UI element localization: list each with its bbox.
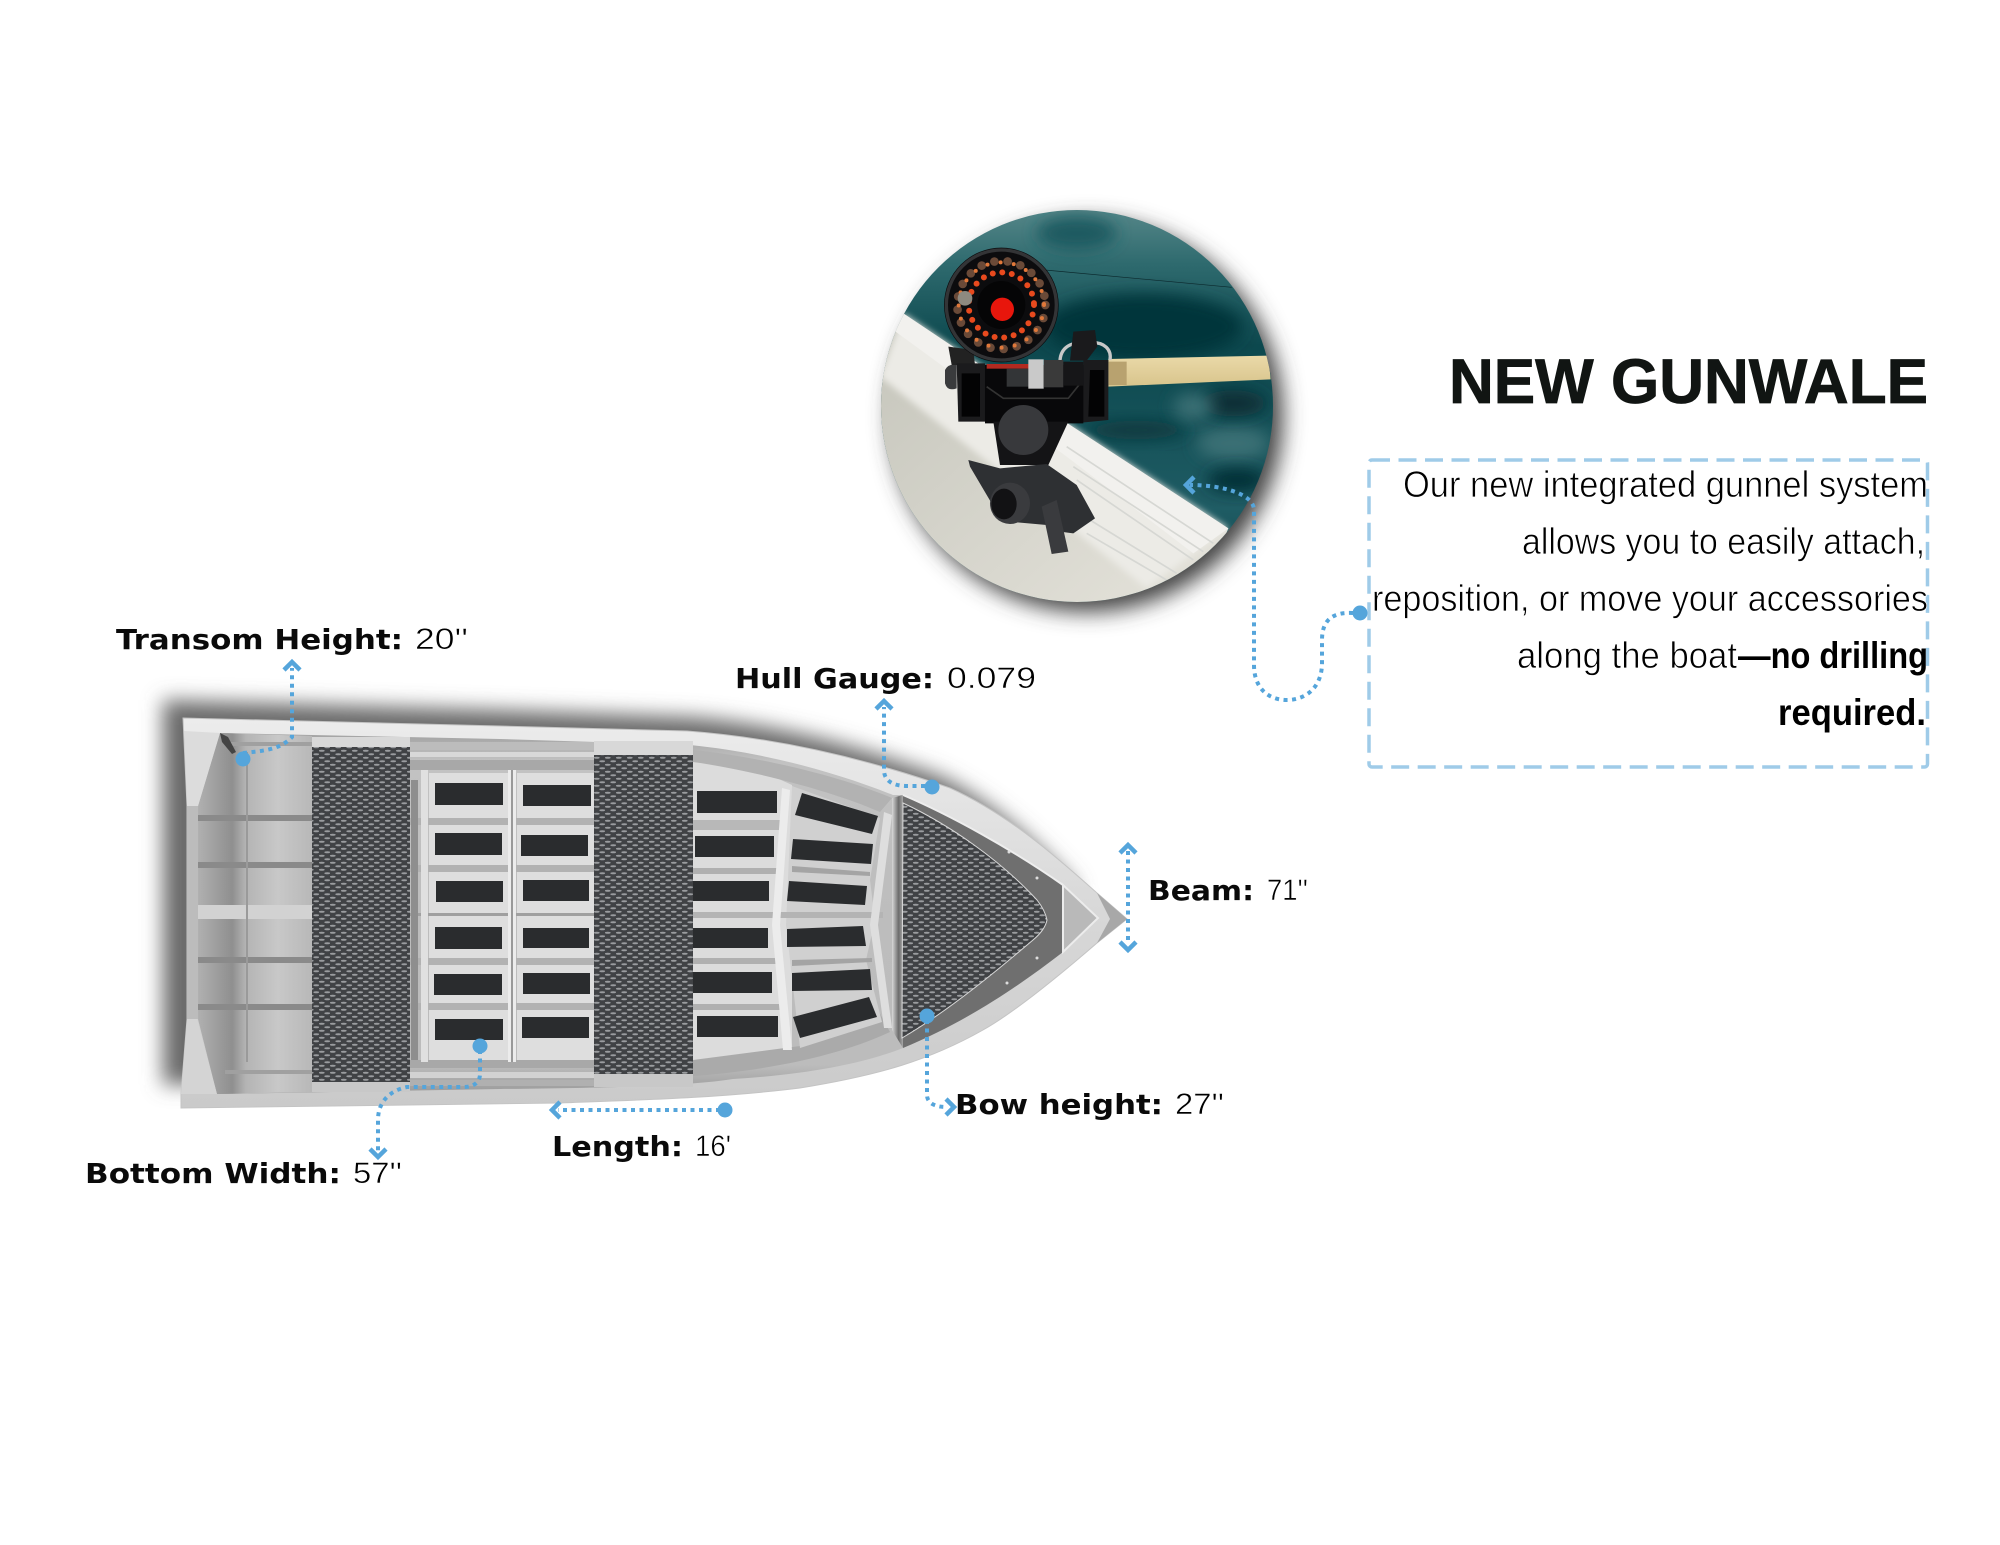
description panel [1369,460,1928,767]
description text: along the boat [1517,635,1738,676]
description text: —no drilling [1738,635,1928,676]
spec label: length: Length: [552,1130,683,1163]
spec label: bow height [920,1008,1224,1121]
middle deck mesh [594,741,693,1087]
spec label: hull gauge: 0.079 [947,662,1036,695]
spec label: beam [1120,845,1308,950]
bow deck [902,795,1127,1048]
centre bay rails and panels [410,742,594,1086]
spec label: bottom width: Bottom Width: [85,1157,341,1190]
photo: fishing reel on gunwale mount [873,203,1283,612]
stern deck mesh [312,737,410,1092]
infographic canvas [88,202,1930,1184]
spec label: beam: Beam: [1148,874,1254,907]
spec label: hull gauge: Hull Gauge: [735,662,934,695]
description text: Our new integrated gunnel system [1403,464,1928,505]
description text: required. [1778,692,1926,733]
spec label: transom height: 20'' [415,623,468,656]
spec label: transom height: Transom Height: [116,623,403,656]
spec label: beam: 71'' [1267,874,1308,907]
hull interior [198,733,1098,1094]
spec label: bow height: Bow height: [955,1088,1163,1121]
spec label: bottom width: 57'' [353,1157,402,1190]
transom section [181,731,312,1094]
description text [1372,464,1928,733]
heading: new gunwale: NEW GUNWALE [1449,347,1928,417]
boat top-view illustration [163,700,1127,1108]
spec label: bow height: 27'' [1175,1088,1224,1121]
spec label: length: 16' [695,1130,731,1163]
photo shadow [891,220,1283,612]
black non-slip pads [434,783,878,1040]
spec label: hull gauge [735,662,1036,794]
forward bay rails and panels [693,750,903,1076]
connector: gunwale callout to photo [1186,477,1368,700]
gunwale hull outline [181,718,1127,1108]
spec label: length [552,1102,732,1163]
spec label: transom height [116,623,468,766]
description text: allows you to easily attach, [1522,521,1925,562]
dashed callout frame [1369,460,1928,767]
description text: reposition, or move your accessories [1372,578,1928,619]
circular photo [873,203,1280,610]
hull shadow [163,700,1075,1085]
spec label: bottom width [85,1038,488,1190]
